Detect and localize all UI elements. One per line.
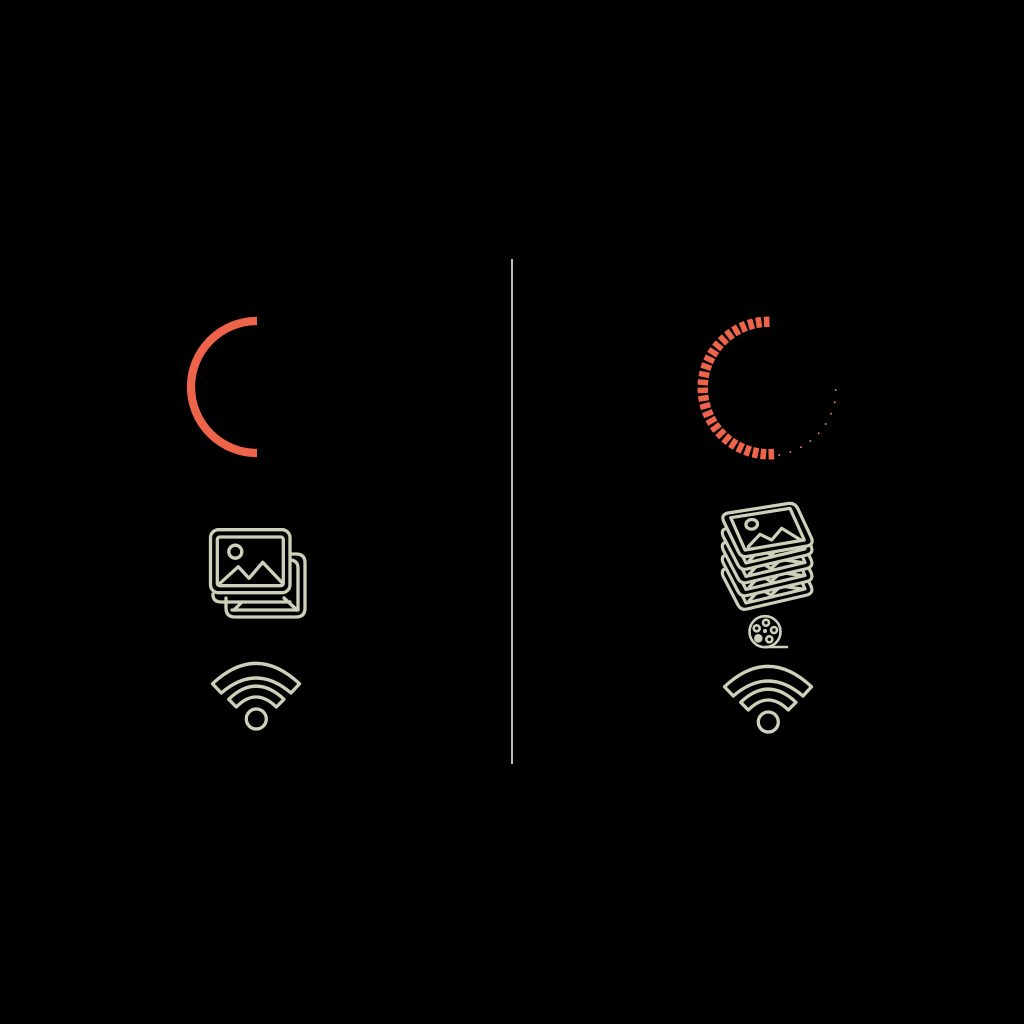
right panel: film reel icon <box>750 616 787 647</box>
stacked image layer 2 <box>722 529 812 583</box>
left panel: icon of few stacked images <box>210 530 305 617</box>
back image <box>226 554 305 617</box>
center divider <box>511 259 513 764</box>
stacked image layer 3 <box>722 542 812 596</box>
right panel: remaining progress dots <box>778 389 837 456</box>
right panel: wifi icon <box>724 666 812 732</box>
front image <box>210 530 290 593</box>
top image <box>723 503 812 557</box>
right panel: icon of many stacked images <box>722 503 812 609</box>
right panel: segmented progress ring <box>697 316 774 460</box>
left panel: solid half progress arc <box>191 321 257 453</box>
stacked image layer 4 <box>722 556 812 609</box>
stacked image layer 1 <box>722 516 812 569</box>
left panel: wifi icon <box>212 663 300 729</box>
middle image <box>213 594 290 602</box>
